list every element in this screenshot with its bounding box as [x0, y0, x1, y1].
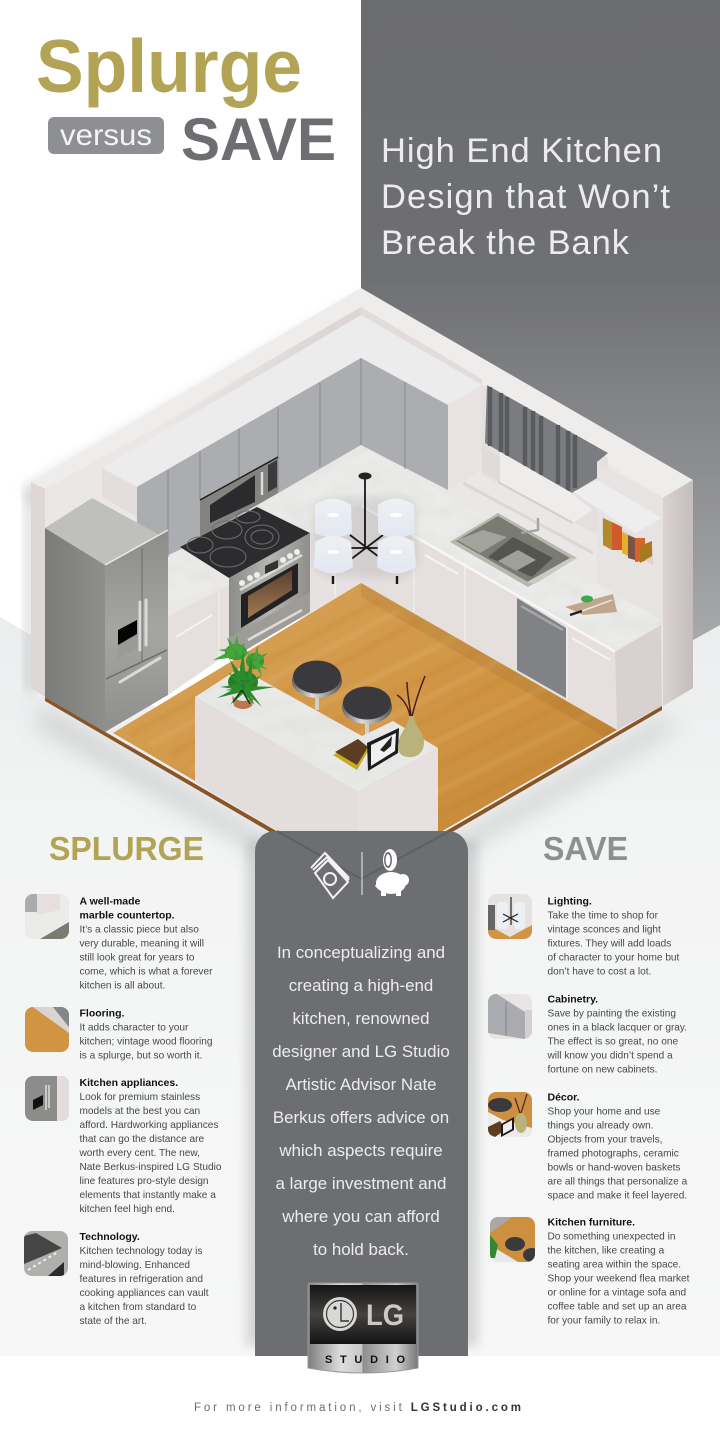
splurge item: marble countertop: marble countertop.: [80, 910, 175, 922]
splurge item: marble countertop: very durable, meaning it will: [80, 938, 204, 950]
save item: decor: space and make it feel layered.: [548, 1190, 687, 1202]
splurge item: kitchen appliances: models at the best you can: [80, 1106, 200, 1117]
panel text: Berkus offers advice on: [273, 1108, 449, 1127]
thumbnail: flooring: [25, 1007, 69, 1052]
kitchen soft shadows: [22, 292, 670, 910]
title: Splurge versus Save: SAVE: [181, 106, 336, 173]
potted plant: [213, 635, 275, 709]
splurge item: kitchen appliances: Kitchen appliances.: [80, 1077, 178, 1089]
save item: decor: are all things that personalize a: [548, 1176, 688, 1188]
subtitle: Break the Bank: [381, 224, 630, 262]
panel text: where you can afford: [281, 1207, 440, 1226]
splurge item: kitchen appliances: Look for premium stainless: [80, 1092, 200, 1103]
subtitle: [381, 132, 670, 262]
pendant light: [313, 472, 417, 584]
heading: splurge column: SPLURGE: [49, 830, 204, 867]
panel text: designer and LG Studio: [272, 1042, 450, 1061]
save item: cabinetry: Save by painting the existing: [548, 1008, 676, 1020]
save item: lighting: [488, 894, 680, 978]
save item: kitchen furniture: Kitchen furniture.: [548, 1216, 635, 1228]
save item: lighting: fixtures. They will add loads: [548, 938, 671, 950]
save item: lighting: don’t have to cost a lot.: [548, 966, 651, 978]
versus pill: versus: [60, 119, 152, 152]
panel text: creating a high-end: [289, 976, 433, 995]
save item: kitchen furniture: coffee table and set up an area: [548, 1302, 687, 1312]
LG Studio badge: LG: [366, 1299, 404, 1332]
lower cabinets: [168, 504, 662, 730]
icon: coin and piggy bank: [375, 849, 409, 896]
bar stools: [292, 660, 392, 735]
splurge item: technology: a kitchen from standard to: [80, 1302, 197, 1313]
versus pill: [48, 117, 164, 154]
subtitle: High End Kitchen: [381, 132, 662, 170]
splurge item: marble countertop: A well-made: [80, 896, 141, 908]
microwave: [200, 457, 278, 537]
splurge item: marble countertop: kitchen is all about.: [80, 980, 165, 992]
splurge item: kitchen appliances: worth every cent. The new,: [78, 1148, 200, 1159]
splurge item: flooring: It adds character to your: [80, 1022, 189, 1034]
thumbnail: cabinets: [488, 994, 532, 1039]
save item: cabinetry: [488, 994, 687, 1076]
splurge item: flooring: [25, 1007, 212, 1062]
LG Studio badge: [308, 1283, 418, 1373]
thumbnail: range: [24, 1231, 68, 1276]
icon: money stack: [311, 853, 349, 898]
splurge item: kitchen appliances: kitchen feel high end.: [80, 1204, 175, 1215]
thumbnail: stools: [490, 1217, 535, 1262]
splurge item: kitchen appliances: [25, 1076, 222, 1215]
save item: cabinetry: Cabinetry.: [548, 994, 598, 1006]
save item: lighting: Lighting.: [548, 896, 592, 908]
panel text: to hold back.: [313, 1240, 409, 1259]
save item: lighting: of character to your home but: [548, 952, 680, 964]
panel text: kitchen, renowned: [292, 1009, 430, 1028]
panel text: a large investment and: [276, 1174, 446, 1193]
divider: [361, 852, 363, 895]
sink: [450, 513, 577, 587]
save item: cabinetry: ones in a black lacquer or gray.: [548, 1022, 687, 1034]
splurge item: technology: features in refrigeration and: [80, 1274, 203, 1285]
hardwood floor: [45, 583, 662, 832]
save item: kitchen furniture: or online for a vintage sofa and: [548, 1288, 686, 1298]
splurge item: technology: mind-blowing. Enhanced: [80, 1260, 190, 1271]
refrigerator: [45, 498, 168, 732]
save item: decor: Shop your home and use: [548, 1106, 661, 1118]
subtitle: Design that Won’t: [381, 178, 670, 216]
splurge item: technology: cooking appliances can vault: [80, 1288, 209, 1299]
save item: decor: Objects from your travels,: [548, 1134, 662, 1146]
splurge item: kitchen appliances: afford. Hardworking appliances: [80, 1120, 218, 1131]
splurge item: flooring: is a splurge, but so worth it.: [80, 1050, 202, 1062]
splurge item: marble countertop: It’s a classic piece but also: [80, 924, 199, 936]
LG Studio badge: STUDIO: [325, 1354, 405, 1366]
splurge item: technology: Kitchen technology today is: [80, 1246, 202, 1257]
splurge item: kitchen appliances: Nate Berkus-inspired LG Studio: [80, 1162, 222, 1173]
marble countertop: [168, 445, 661, 650]
book stack: [333, 739, 368, 770]
save item: kitchen furniture: seating area within the space.: [548, 1260, 681, 1270]
save item: cabinetry: fortune on new cabinets.: [548, 1064, 657, 1076]
thumbnail: countertop: [25, 894, 69, 939]
splurge item: technology: state of the art.: [80, 1316, 147, 1327]
splurge item: kitchen appliances: line features pro-style design: [80, 1176, 209, 1187]
splurge item: kitchen appliances: elements that instantly make a: [80, 1190, 216, 1201]
splurge item: marble countertop: come, which is what a forever: [80, 966, 213, 978]
splurge item: kitchen appliances: that can go the distance are: [80, 1134, 204, 1145]
save item: decor: framed photographs, ceramic: [548, 1148, 679, 1160]
save item: decor: [488, 1092, 688, 1202]
isometric kitchen illustration: [31, 288, 693, 885]
save item: lighting: Take the time to shop for: [548, 910, 659, 922]
thumbnail: fridge: [25, 1076, 69, 1121]
upper cabinets: [102, 315, 482, 570]
outer walls: [31, 288, 693, 706]
save item: kitchen furniture: for your family to relax in.: [548, 1316, 660, 1326]
splurge item: technology: Technology.: [80, 1231, 140, 1243]
panel text: which aspects require: [278, 1141, 443, 1160]
save item: cabinetry: will know you didn’t spend a: [546, 1050, 673, 1062]
dishwasher: [517, 598, 566, 698]
window and roman blind: [463, 385, 608, 553]
thumbnail: decor: [488, 1092, 532, 1137]
save item: decor: Décor.: [548, 1092, 580, 1104]
save item: cabinetry: The effect is so great, no one: [548, 1036, 678, 1048]
thumbnail: pendant: [488, 894, 532, 939]
splurge item: flooring: kitchen; vintage wood flooring: [80, 1036, 212, 1048]
save item: kitchen furniture: [490, 1216, 690, 1326]
framed picture: [367, 728, 399, 771]
panel text: Artistic Advisor Nate: [285, 1075, 437, 1094]
save item: decor: bowls or hand-woven baskets: [548, 1162, 680, 1174]
splurge item: technology: [24, 1231, 209, 1327]
splurge item: marble countertop: still look great for years to: [80, 952, 195, 964]
center panel: [246, 831, 478, 1356]
save item: lighting: vintage sconces and light: [548, 924, 661, 936]
title: Splurge versus Save: [36, 24, 336, 173]
cutting board and knife: [565, 594, 617, 615]
save item: kitchen furniture: the kitchen, like creating a: [548, 1246, 665, 1256]
footer link: For more information, visit LGStudio.com: [194, 1402, 521, 1414]
island counter: [195, 668, 438, 878]
splurge item: marble countertop: [25, 894, 213, 992]
vase with reeds: [397, 676, 425, 757]
open shelf with books: [573, 462, 663, 628]
title: Splurge versus Save: Splurge: [36, 24, 302, 108]
heading: save column: SAVE: [543, 830, 628, 867]
range and cooktop: [180, 507, 310, 660]
save item: decor: things you already own.: [548, 1120, 654, 1132]
splurge item: flooring: Flooring.: [80, 1008, 124, 1020]
panel text: [272, 943, 450, 1259]
save item: kitchen furniture: Shop your weekend flea market: [548, 1274, 690, 1284]
panel text: In conceptualizing and: [277, 943, 445, 962]
save item: kitchen furniture: Do something unexpected in: [548, 1232, 675, 1242]
